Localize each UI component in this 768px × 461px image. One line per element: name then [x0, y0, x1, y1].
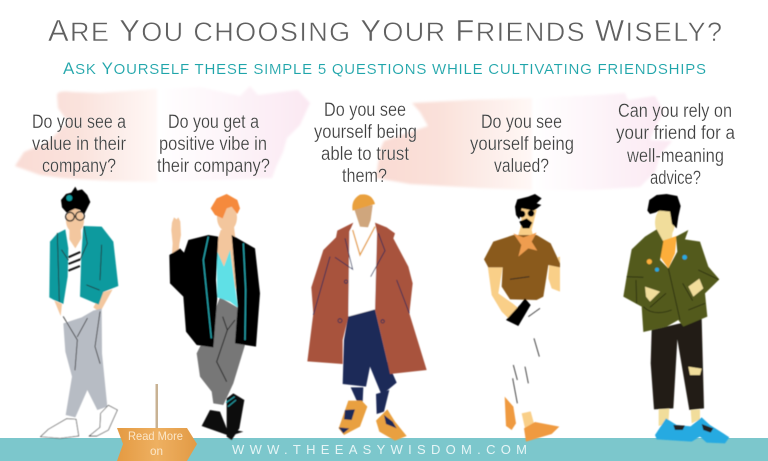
- question 1: Do you see a: [32, 112, 126, 133]
- question 4: yourself being: [470, 134, 574, 155]
- question 1: [32, 112, 127, 177]
- question 5: well-meaning: [626, 146, 724, 167]
- question 2: [157, 112, 270, 177]
- signpost: read more: Read More: [128, 429, 183, 443]
- figure 1: teal jacket: [41, 187, 118, 438]
- signpost: read more: [117, 384, 197, 461]
- question 2: their company?: [157, 156, 270, 177]
- bottom band: [0, 438, 768, 461]
- question 4: [470, 112, 574, 177]
- question 4: Do you see: [481, 112, 562, 133]
- title: ARE YOU CHOOSING YOUR FRIENDS WISELY?: [48, 13, 722, 48]
- question 5: advice?: [650, 168, 701, 189]
- question 1: company?: [42, 156, 116, 177]
- question 5: your friend for a: [616, 123, 735, 144]
- question 1: value in their: [32, 134, 127, 155]
- question 5: [616, 101, 735, 189]
- figure 2: black jacket: [169, 194, 260, 440]
- signpost: read more: on: [150, 444, 163, 458]
- figure 5: olive jacket: [623, 194, 729, 443]
- brush stroke: right background: [376, 93, 672, 190]
- figure 3: rust coat: [307, 194, 427, 441]
- question 3: them?: [342, 166, 387, 187]
- question 3: Do you see: [324, 100, 406, 121]
- figure 4: brown t-shirt: [484, 194, 560, 442]
- question 5: Can you rely on: [618, 101, 732, 122]
- question 3: yourself being: [314, 122, 417, 143]
- question 3: able to trust: [321, 144, 410, 165]
- question 4: valued?: [494, 156, 549, 177]
- question 3: [314, 100, 417, 187]
- brush stroke: left background: [15, 86, 310, 182]
- question 2: Do you get a: [168, 112, 259, 133]
- subtitle: ASK YOURSELF THESE SIMPLE 5 QUESTIONS WHILE CULTIVATING FRIENDSHIPS: [63, 59, 706, 78]
- website url: WWW.THEEASYWISDOM.COM: [232, 442, 527, 457]
- question 2: positive vibe in: [159, 134, 267, 155]
